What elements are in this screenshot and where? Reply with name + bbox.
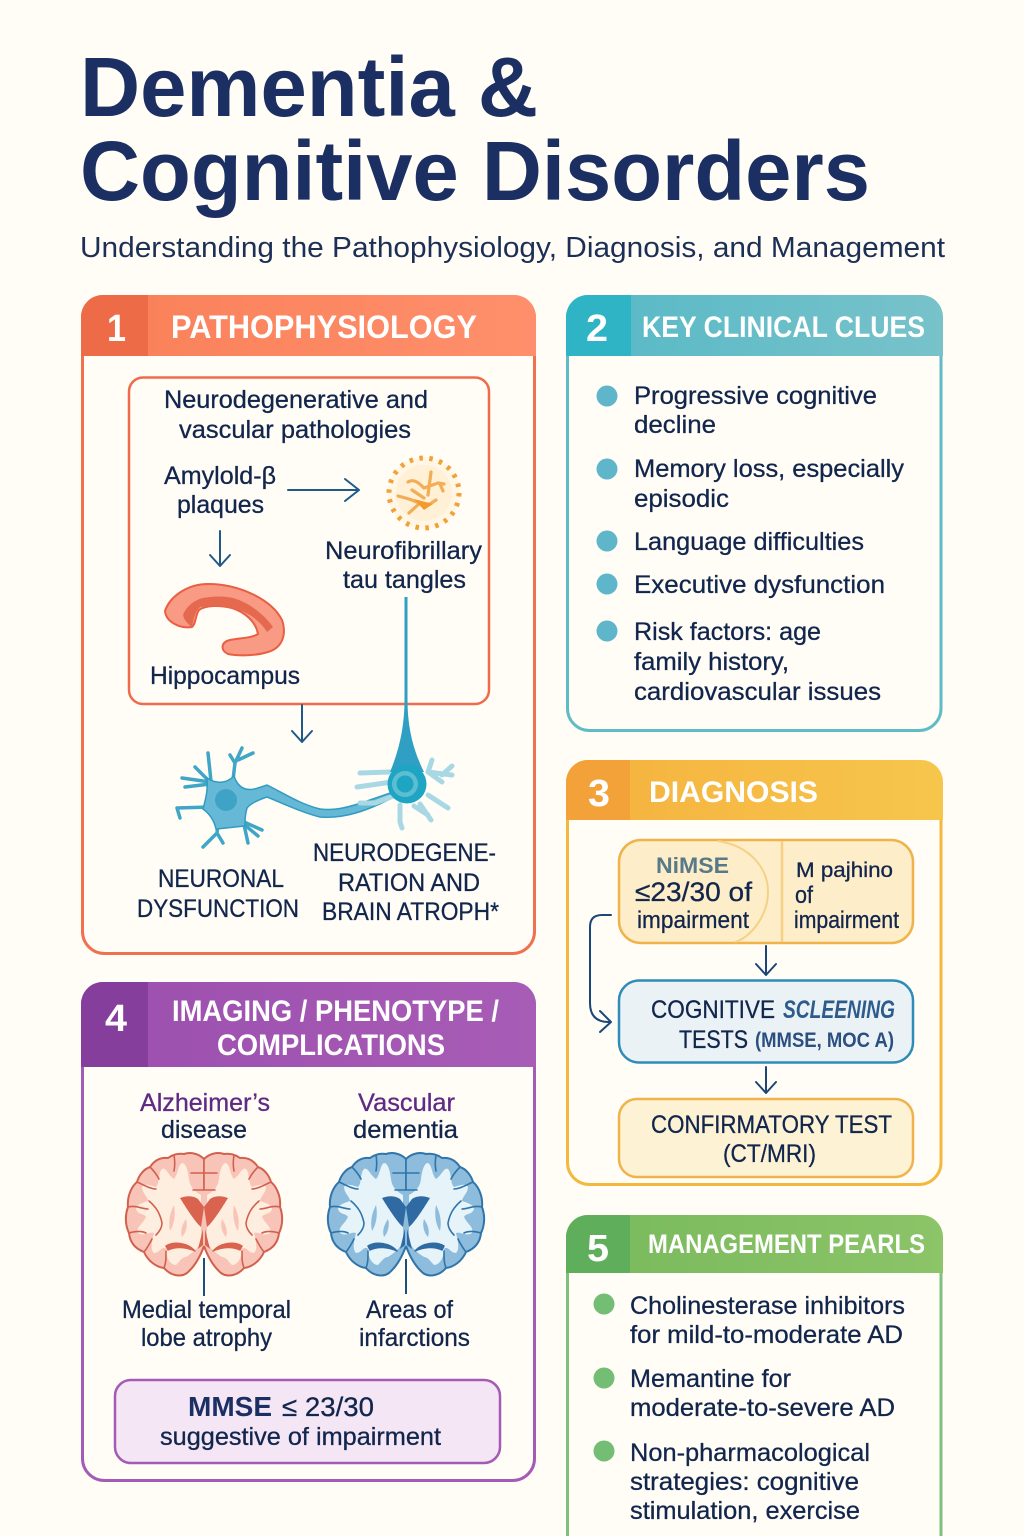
text: neuronal dysfunction: [137, 865, 299, 923]
illustration: neurons: [177, 597, 452, 847]
box: screening tests: COGNITIVE: [651, 996, 775, 1024]
panel: diagnosis: [566, 760, 943, 1184]
box: confirmatory test: (CT/MRI): [723, 1140, 816, 1168]
box: MMSE: M pajhino: [796, 859, 893, 882]
header: imaging: [81, 982, 536, 1067]
list: progressive decline: [596, 382, 877, 439]
icon: hippocampus: [165, 584, 284, 655]
pointer: infarctions: [405, 1259, 407, 1294]
title: Cognitive Disorders: [80, 124, 870, 218]
header: management: 5: [587, 1228, 609, 1270]
header: diagnosis: [566, 760, 943, 820]
label: alzheimer's disease: disease: [161, 1116, 247, 1144]
neuron: degenerating: [357, 597, 452, 828]
box: confirmatory test: [619, 1099, 913, 1177]
text: neurodegeneration: BRAIN ATROPH*: [322, 898, 499, 926]
label: vascular dementia: Vascular: [358, 1089, 455, 1117]
title: Dementia &: [80, 40, 538, 134]
text: medial temporal lobe atrophy: lobe atrophy: [141, 1324, 272, 1352]
list: non-pharmacological: Non-pharmacological: [630, 1439, 870, 1467]
panel: pathophysiology: [81, 295, 536, 954]
list: memory loss: episodic: [634, 485, 729, 513]
title: [80, 40, 870, 218]
box: confirmatory test: CONFIRMATORY TEST: [651, 1111, 892, 1139]
pathology box: [129, 378, 489, 704]
arrow: bracket loop: [590, 915, 611, 1032]
arrow: to neuronal dysfunction: [292, 705, 312, 742]
text: neurodegeneration: [313, 839, 499, 926]
list: risk factors: family history,: [634, 648, 789, 676]
text: neurodegeneration: RATION AND: [338, 869, 480, 897]
header: imaging: IMAGING / PHENOTYPE /: [172, 995, 500, 1028]
text: pathologies heading: Neurodegenerative and: [164, 386, 428, 414]
header: management: [566, 1215, 943, 1273]
text: tau tangles: tau tangles: [343, 566, 466, 594]
box: screening tests: [619, 980, 913, 1062]
text: pathologies heading: [164, 386, 428, 444]
pointer: medial temporal: [203, 1258, 205, 1296]
list: non-pharmacological: [594, 1439, 870, 1525]
panel: imaging phenotype complications: [81, 982, 536, 1480]
list: memantine: [594, 1365, 895, 1422]
callout: MMSE: MMSE: [188, 1391, 272, 1422]
box: MMSE: [619, 840, 913, 943]
box: MMSE: impairment: [637, 907, 749, 934]
list: risk factors: [596, 618, 881, 706]
callout: MMSE: [115, 1380, 500, 1463]
list: cholinesterase: [594, 1292, 905, 1349]
box: MMSE: impairment: [794, 907, 899, 934]
list: cholinesterase: for mild-to-moderate AD: [630, 1321, 903, 1349]
box: screening tests: SCLEENING: [783, 996, 895, 1024]
text: neurodegeneration: NEURODEGENE-: [313, 839, 496, 867]
header: diagnosis: 3: [588, 773, 610, 815]
text: hippocampus: Hippocampus: [150, 662, 300, 690]
text: tau tangles: Neurofibrillary: [325, 537, 483, 565]
header: clinical clues: 2: [586, 308, 608, 350]
list: non-pharmacological: strategies: cognitive: [630, 1468, 859, 1496]
arrow: screening to confirmatory: [756, 1067, 776, 1093]
list: progressive decline: decline: [634, 411, 716, 439]
label: vascular dementia: dementia: [353, 1116, 458, 1144]
arrow: plaques to hippocampus: [210, 531, 230, 566]
icon: pink brain: [126, 1153, 282, 1275]
callout: MMSE: suggestive of impairment: [160, 1423, 441, 1451]
panel: management pearls: [566, 1215, 943, 1536]
icon: blue brain: [328, 1153, 484, 1275]
text: medial temporal lobe atrophy: Medial temporal: [122, 1296, 291, 1324]
list: memantine: Memantine for: [630, 1365, 791, 1393]
list: risk factors: Risk factors: age: [634, 618, 821, 646]
header: imaging: 4: [105, 998, 127, 1040]
text: areas of infarctions: [359, 1296, 470, 1352]
text: neuronal dysfunction: DYSFUNCTION: [137, 895, 299, 923]
text: pathologies heading: vascular pathologies: [179, 416, 411, 444]
header: pathophysiology: 1: [107, 308, 126, 350]
header: management: MANAGEMENT PEARLS: [648, 1229, 925, 1259]
text: amyloid plaques: [164, 462, 276, 519]
header: diagnosis: DIAGNOSIS: [649, 776, 818, 809]
header: imaging: COMPLICATIONS: [217, 1029, 445, 1062]
list: cholinesterase: Cholinesterase inhibitors: [630, 1292, 905, 1320]
list: language: Language difficulties: [634, 528, 864, 556]
box: screening tests: TESTS: [679, 1026, 748, 1054]
neuron: healthy: [177, 748, 390, 847]
text: areas of infarctions: infarctions: [359, 1324, 470, 1352]
panel: key clinical clues: [566, 295, 943, 730]
text: amyloid plaques: Amylold-β: [164, 462, 276, 490]
box: MMSE: of: [795, 882, 813, 909]
box: MMSE: NiMSE: [656, 853, 729, 878]
arrow: plaques to tangles: [288, 479, 359, 501]
list: progressive decline: Progressive cognitive: [634, 382, 877, 410]
box: MMSE: ≤23/30 of: [635, 877, 753, 907]
header: pathophysiology: [81, 295, 536, 356]
subtitle: Understanding the Pathophysiology, Diagnosis, and Management: [80, 232, 945, 264]
arrow: mmse to screening: [756, 946, 776, 975]
text: amyloid plaques: plaques: [177, 491, 264, 519]
list: executive: Executive dysfunction: [634, 571, 885, 599]
text: areas of infarctions: Areas of: [366, 1296, 453, 1324]
text: tau tangles: [325, 537, 483, 594]
header: clinical clues: [566, 295, 943, 356]
header: pathophysiology: PATHOPHYSIOLOGY: [171, 309, 477, 345]
list: non-pharmacological: stimulation, exercise: [630, 1497, 860, 1525]
icon: plaque: [388, 457, 460, 529]
label: vascular dementia: [353, 1089, 458, 1144]
text: neuronal dysfunction: NEURONAL: [158, 865, 284, 893]
label: alzheimer's disease: [140, 1089, 270, 1144]
list: risk factors: cardiovascular issues: [634, 678, 881, 706]
list: memory loss: Memory loss, especially: [634, 455, 905, 483]
list: memory loss: [596, 455, 905, 513]
list: memantine: moderate-to-severe AD: [630, 1394, 895, 1422]
header: clinical clues: KEY CLINICAL CLUES: [642, 311, 925, 344]
label: alzheimer's disease: Alzheimer’s: [140, 1089, 270, 1117]
callout: MMSE: ≤ 23/30: [282, 1392, 374, 1422]
text: medial temporal lobe atrophy: [122, 1296, 291, 1352]
box: screening tests: (MMSE, MOC A): [755, 1029, 894, 1052]
